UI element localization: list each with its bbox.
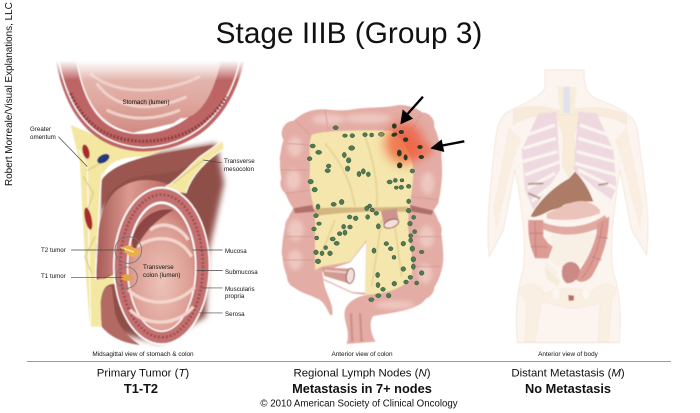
colon wall xyxy=(113,187,210,345)
title: Stage IIIB (Group 3) xyxy=(216,17,482,50)
caption: body view: Anterior view of body xyxy=(538,351,599,358)
transverse colon xyxy=(542,215,608,235)
body silhouette xyxy=(488,70,648,343)
anatomy labels: propria xyxy=(225,293,245,300)
ascending colon xyxy=(528,220,553,258)
pelvis and femurs xyxy=(518,284,617,342)
white gap between mesentery lobes xyxy=(322,242,366,293)
fade at top xyxy=(50,50,257,80)
lymph nodes: metastatic xyxy=(391,123,424,168)
stomach wall xyxy=(55,57,245,152)
colon haustra shading xyxy=(286,114,434,309)
anatomy labels: Transverse xyxy=(224,158,255,165)
panel: distant metastasis illustration xyxy=(488,70,648,358)
T1 tumor xyxy=(116,267,137,288)
lungs and ribs xyxy=(522,112,560,210)
anatomy labels: Greater xyxy=(30,126,51,133)
staging: distant metastasis: Distant Metastasis (M) xyxy=(511,368,625,380)
anatomy labels: colon (lumen) xyxy=(143,272,180,279)
staging: regional lymph nodes: Regional Lymph Nodes (N) xyxy=(294,368,431,380)
leader lines xyxy=(58,137,223,313)
arm bones xyxy=(493,127,522,230)
caption: stomach and colon view: Midsagittal view of stomach & colon xyxy=(92,351,194,358)
arrow: right xyxy=(430,139,464,152)
fat: transverse mesocolon xyxy=(165,141,223,193)
ileum tube xyxy=(322,267,351,283)
anatomy labels: T2 tumor xyxy=(41,247,66,254)
caption: colon view: Anterior view of colon xyxy=(331,351,393,358)
staging: primary tumor: Primary Tumor (T) xyxy=(97,368,189,380)
panel: primary tumor illustration xyxy=(30,50,258,358)
anatomy labels: Serosa xyxy=(225,311,245,318)
anatomy labels xyxy=(30,99,258,318)
mesentery xyxy=(310,130,413,295)
anatomy labels: Stomach (lumen) xyxy=(122,99,170,106)
staging: regional lymph nodes: Metastasis in 7+ nodes xyxy=(292,381,432,396)
image credit: Robert Morreale/Visual Explanations, LLC xyxy=(4,2,15,186)
anatomy labels: Muscularis xyxy=(225,286,255,293)
colon lumen folds xyxy=(128,225,195,322)
anatomy labels: T1 tumor xyxy=(41,273,66,280)
arrow: upper xyxy=(400,97,423,124)
divider xyxy=(27,361,671,362)
anatomy labels: Mucosa xyxy=(225,248,247,255)
tumor redness xyxy=(385,123,424,164)
staging: distant metastasis: No Metastasis xyxy=(525,381,611,396)
staging: regional lymph nodes xyxy=(292,368,432,396)
anatomy: stomach and colon section xyxy=(50,50,257,345)
anatomy labels: Transverse xyxy=(143,264,174,271)
vessels in fat xyxy=(81,144,91,160)
staging: primary tumor: T1-T2 xyxy=(124,381,158,396)
stomach lumen xyxy=(76,57,222,133)
colon xyxy=(280,105,443,344)
anatomy labels: Submucosa xyxy=(225,269,258,276)
background tissue fading outward xyxy=(102,143,224,343)
panel: regional lymph nodes illustration xyxy=(280,97,464,358)
liver xyxy=(531,172,593,217)
trachea xyxy=(557,87,577,113)
fat: greater omentum xyxy=(71,125,177,327)
anatomy labels: mesocolon xyxy=(224,166,254,173)
descending and sigmoid colon xyxy=(575,217,609,282)
outer colon fold xyxy=(96,180,170,280)
T2 tumor xyxy=(115,237,142,263)
sternum xyxy=(556,115,579,178)
colon lobes xyxy=(280,111,443,299)
stomach xyxy=(547,201,600,220)
copyright: © 2010 American Society of Clinical Oncology xyxy=(260,398,458,410)
cut tube xyxy=(381,208,399,228)
staging: primary tumor xyxy=(97,368,189,396)
staging: distant metastasis xyxy=(511,368,625,396)
anatomy labels: omentum xyxy=(30,134,56,141)
lymph nodes: green xyxy=(307,126,424,302)
intestines pale xyxy=(548,233,597,267)
